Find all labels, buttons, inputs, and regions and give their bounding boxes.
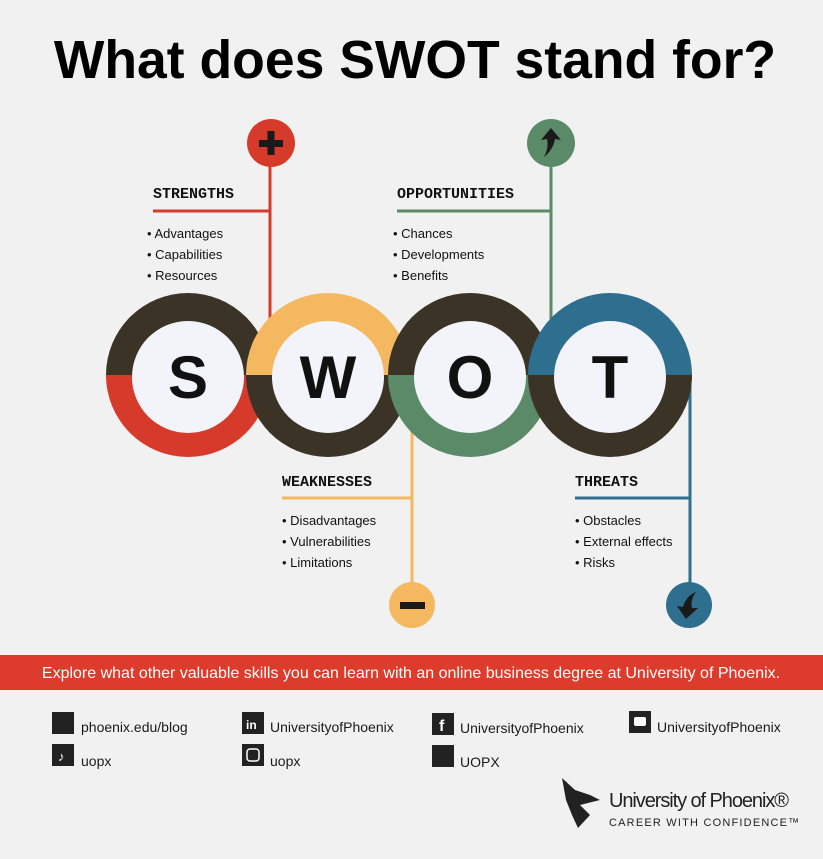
text: threats: THREATS (575, 474, 638, 491)
connector: strengths (153, 150, 270, 320)
social links: UniversityofPhoenix (657, 719, 781, 735)
connector: opportunities (397, 150, 551, 320)
social links: in (246, 718, 257, 732)
text: weaknesses (282, 474, 377, 570)
circle T (528, 293, 692, 457)
logo: University of Phoenix® (609, 790, 789, 812)
text: threats: • External effects (575, 534, 673, 549)
social links (52, 711, 781, 770)
text: strengths: • Resources (147, 268, 218, 283)
text: opportunities: • Chances (393, 226, 453, 241)
text: strengths: • Capabilities (147, 247, 223, 262)
title: What does SWOT stand for? (54, 31, 776, 90)
social links: uopx (81, 753, 111, 769)
icon: down arrow (666, 582, 712, 628)
social links: UOPX (460, 754, 500, 770)
social links: f (439, 718, 445, 735)
banner (0, 655, 823, 690)
social links: UniversityofPhoenix (270, 719, 394, 735)
text: weaknesses: • Limitations (282, 555, 353, 570)
text: opportunities: OPPORTUNITIES (397, 186, 514, 203)
letter discs: S (168, 344, 208, 411)
text: threats (575, 474, 673, 570)
icon: plus (247, 119, 295, 167)
circle S (106, 293, 270, 457)
text: strengths (147, 186, 234, 283)
text: opportunities (393, 186, 514, 283)
text: weaknesses: WEAKNESSES (282, 474, 372, 491)
circle O (388, 293, 552, 457)
text: threats: • Risks (575, 555, 615, 570)
banner: Explore what other valuable skills you can learn with an online business degree at University of Phoenix. (42, 665, 780, 682)
letter discs: W (300, 344, 357, 411)
text: strengths: STRENGTHS (153, 186, 234, 203)
text: weaknesses: • Vulnerabilities (282, 534, 371, 549)
social links: uopx (270, 753, 300, 769)
letter discs (132, 321, 666, 433)
text: strengths: • Advantages (147, 226, 224, 241)
text: opportunities: • Benefits (393, 268, 449, 283)
letter discs: T (592, 344, 628, 411)
text: weaknesses: • Disadvantages (282, 513, 377, 528)
connector: threats (575, 370, 690, 590)
icon: minus (389, 582, 435, 628)
icon: up arrow (527, 119, 575, 167)
text: threats: • Obstacles (575, 513, 641, 528)
letter discs: O (447, 344, 493, 411)
text: opportunities: • Developments (393, 247, 485, 262)
social links: phoenix.edu/blog (81, 719, 188, 735)
social links: UniversityofPhoenix (460, 720, 584, 736)
circle W (246, 293, 410, 457)
logo: CAREER WITH CONFIDENCE™ (609, 817, 800, 829)
connector: weaknesses (282, 400, 412, 590)
logo (562, 778, 800, 829)
social links: ♪ (58, 749, 64, 764)
